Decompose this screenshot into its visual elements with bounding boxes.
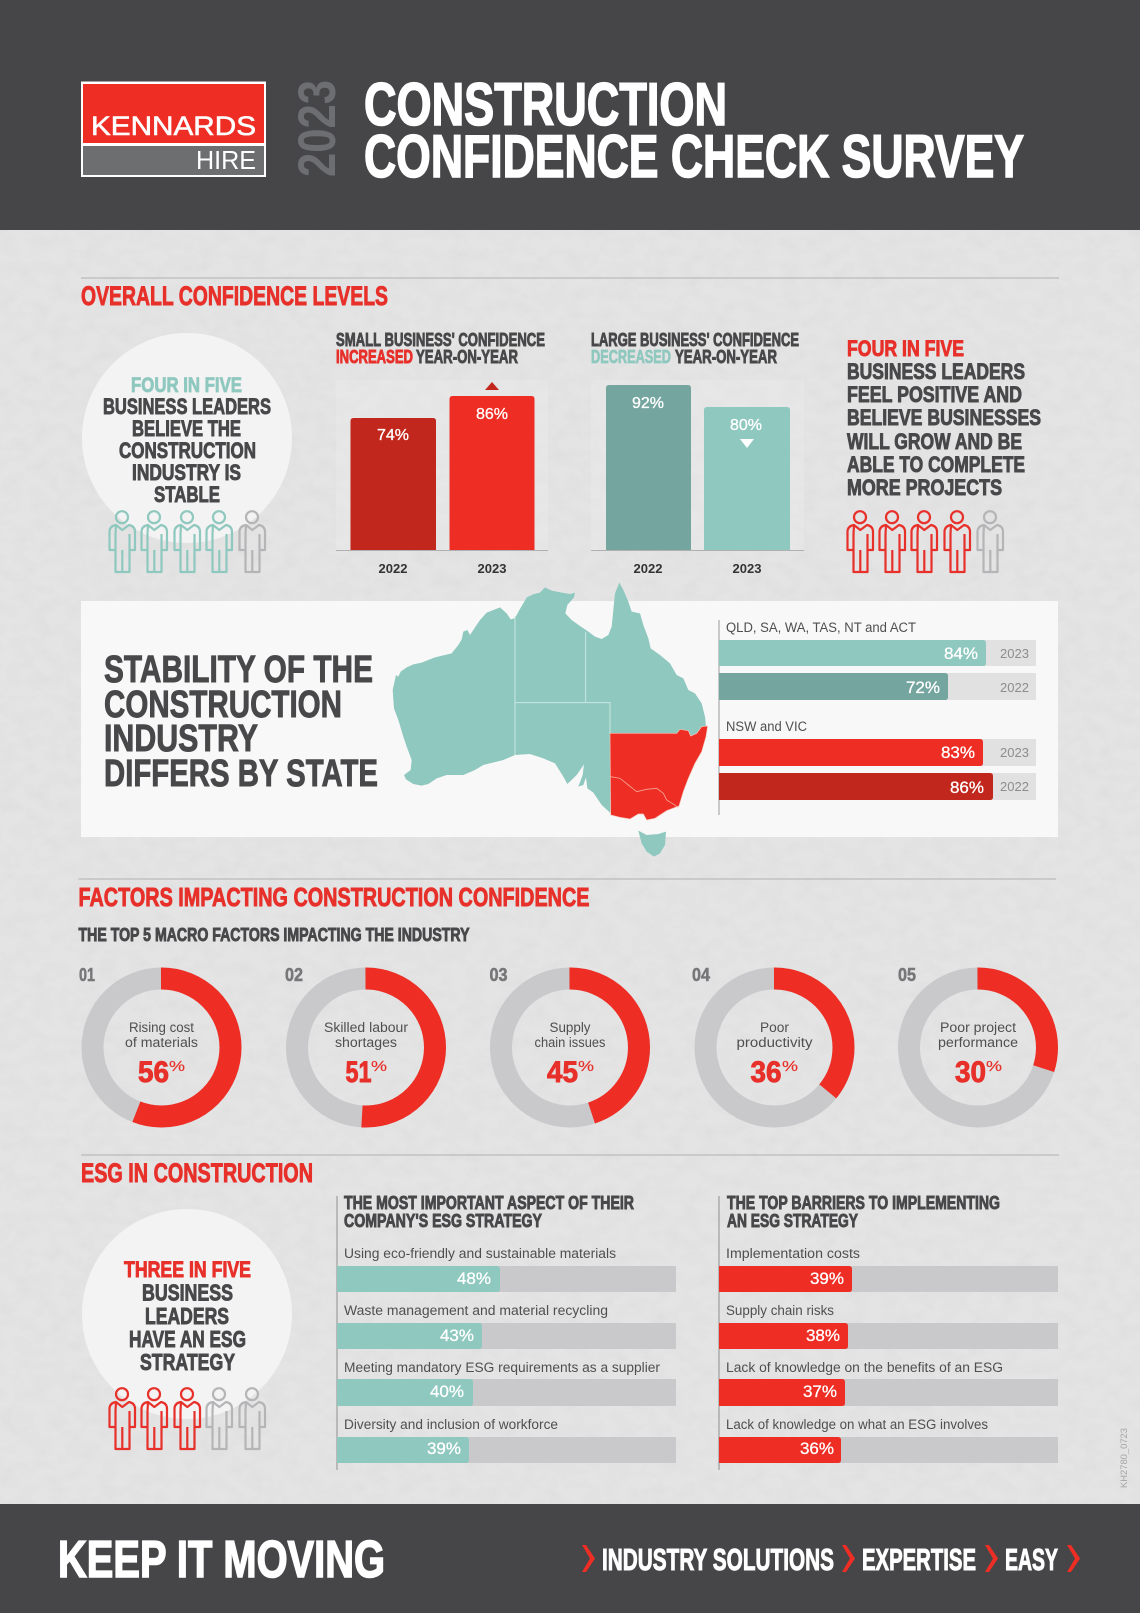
donut 03: supply chain issues: %	[578, 1058, 594, 1075]
chart: most important ESG aspects: THE MOST IMPORTANT ASPECT OF THEIR	[344, 1193, 634, 1213]
donut 05: poor project performance: Poor project	[940, 1020, 1016, 1035]
year 2023 vertical: 2023	[288, 80, 347, 177]
chart: most important ESG aspects	[337, 1193, 676, 1470]
donut 03: supply chain issues: chain issues	[534, 1035, 606, 1050]
chart: top barriers to ESG: THE TOP BARRIERS TO IMPLEMENTING	[727, 1193, 1000, 1213]
chart: large business confidence: 92%	[632, 395, 664, 412]
chart: small business confidence: 74%	[377, 427, 409, 444]
chart: top barriers to ESG: Lack of knowledge on what an ESG involves	[726, 1417, 988, 1432]
chart: large business confidence: LARGE BUSINESS' CONFIDENCE	[591, 329, 799, 350]
donut 02: skilled labour shortages	[285, 965, 435, 1116]
callout: four in five positive	[847, 336, 1041, 572]
chart: most important ESG aspects: 43%	[440, 1326, 474, 1345]
chart: state bars: 2023	[1000, 745, 1029, 760]
donut 02: skilled labour shortages: 02	[285, 965, 303, 985]
chart: large business confidence: 80%	[730, 417, 762, 434]
donut 03: supply chain issues: 03	[490, 965, 508, 985]
callout: four in five positive: BUSINESS LEADERS	[847, 359, 1025, 384]
chart: state bars: 84%	[944, 644, 978, 663]
chart: small business confidence: 86%	[476, 406, 508, 423]
heading: stability differs by state	[104, 649, 378, 795]
logo: Kennards Hire	[81, 82, 266, 177]
chart: large business confidence	[591, 329, 804, 576]
callout: three in five ESG: LEADERS	[145, 1303, 229, 1329]
donut 05: poor project performance	[898, 965, 1047, 1116]
footer values: EASY	[1005, 1542, 1058, 1577]
concrete background	[0, 230, 1140, 1504]
donut 05: poor project performance: performance	[938, 1035, 1018, 1050]
donut 02: skilled labour shortages: 51	[346, 1056, 372, 1089]
donut 04: poor productivity: Poor	[760, 1020, 789, 1035]
callout: three in five ESG: BUSINESS	[142, 1280, 233, 1306]
chart: small business confidence: SMALL BUSINESS' CONFIDENCE	[336, 329, 545, 350]
chart: large business confidence: DECREASED	[591, 346, 671, 367]
chart: state bars	[719, 620, 1036, 815]
donut 01: rising cost of materials: of materials	[125, 1035, 198, 1050]
callout: four in five stable: INDUSTRY IS	[132, 460, 241, 485]
chart: small business confidence: INCREASED	[336, 346, 413, 367]
artwork code: KH2780_0723	[1119, 1428, 1129, 1488]
callout: three in five ESG	[82, 1209, 292, 1449]
panel: stability by state	[81, 583, 1058, 857]
title: CONSTRUCTION	[364, 71, 727, 138]
chart: top barriers to ESG: AN ESG STRATEGY	[727, 1211, 858, 1231]
heading: stability differs by state: INDUSTRY	[104, 718, 258, 760]
chart: state bars: NSW and VIC	[726, 719, 807, 734]
chart: top barriers to ESG	[719, 1193, 1058, 1470]
chart: top barriers to ESG: 38%	[806, 1326, 840, 1345]
chart: most important ESG aspects: Meeting mandatory ESG requirements as a supplier	[344, 1360, 661, 1375]
chart: state bars: QLD, SA, WA, TAS, NT and ACT	[726, 620, 916, 635]
section heading: overall confidence: OVERALL CONFIDENCE LEVELS	[81, 281, 388, 311]
chart: top barriers to ESG: Supply chain risks	[726, 1303, 834, 1318]
chart: top barriers to ESG: Lack of knowledge on the benefits of an ESG	[726, 1360, 1003, 1375]
callout: three in five ESG: HAVE AN ESG	[129, 1326, 246, 1352]
chart: state bars: 2022	[1000, 680, 1029, 695]
callout: four in five positive: MORE PROJECTS	[847, 475, 1002, 500]
chart: most important ESG aspects: 39%	[427, 1439, 461, 1458]
chart: most important ESG aspects: Using eco-friendly and sustainable materials	[344, 1246, 616, 1261]
callout: four in five positive: FEEL POSITIVE AND	[847, 382, 1022, 407]
donut 05: poor project performance: 30	[955, 1056, 986, 1089]
footer values: INDUSTRY SOLUTIONS	[602, 1542, 834, 1577]
map: Australia	[393, 583, 708, 857]
callout: four in five stable	[82, 333, 292, 572]
donut 01: rising cost of materials: Rising cost	[129, 1020, 194, 1035]
chart: state bars: 72%	[906, 678, 940, 697]
section heading: factors: FACTORS IMPACTING CONSTRUCTION CONFIDENCE	[78, 882, 590, 912]
chart: small business confidence: YEAR-ON-YEAR	[416, 346, 518, 367]
chart: top barriers to ESG: Implementation costs	[726, 1246, 860, 1261]
chart: top barriers to ESG: 36%	[800, 1439, 834, 1458]
callout: four in five stable: FOUR IN FIVE	[131, 374, 242, 397]
logo: Kennards Hire: KENNARDS	[91, 111, 256, 141]
chart: large business confidence: 2023	[733, 561, 761, 576]
callout: four in five positive: ABLE TO COMPLETE	[847, 452, 1025, 477]
chart: most important ESG aspects: COMPANY'S ESG STRATEGY	[344, 1211, 542, 1231]
heading: stability differs by state: STABILITY OF THE	[104, 649, 373, 691]
subheading: top 5 macro factors: THE TOP 5 MACRO FACTORS IMPACTING THE INDUSTRY	[78, 925, 470, 945]
donut 04: poor productivity: 04	[692, 965, 710, 985]
chart: state bars: 83%	[941, 743, 975, 762]
donut 02: skilled labour shortages: shortages	[335, 1035, 397, 1050]
chart: most important ESG aspects: Waste management and material recycling	[344, 1303, 608, 1318]
callout: four in five stable: STABLE	[154, 482, 220, 507]
chart: small business confidence: 2023	[478, 561, 506, 576]
chart: state bars: 86%	[950, 778, 984, 797]
chart: small business confidence: 2022	[379, 561, 407, 576]
donut 01: rising cost of materials: %	[169, 1058, 185, 1075]
title	[364, 71, 1024, 190]
footer values: EXPERTISE	[862, 1542, 976, 1577]
chart: large business confidence: 2022	[634, 561, 662, 576]
donut 01: rising cost of materials: 01	[79, 965, 95, 985]
footer band	[0, 1504, 1140, 1613]
donut 01: rising cost of materials: 56	[138, 1056, 169, 1089]
chart: most important ESG aspects: Diversity and inclusion of workforce	[344, 1417, 558, 1432]
header band	[0, 0, 1140, 230]
donut 02: skilled labour shortages: %	[371, 1058, 387, 1075]
donut 04: poor productivity: %	[782, 1058, 798, 1075]
donut 04: poor productivity	[692, 965, 844, 1116]
icon: people 4 of 5 teal	[110, 511, 265, 572]
callout: four in five stable: BUSINESS LEADERS	[103, 394, 271, 419]
heading: stability differs by state: CONSTRUCTION	[104, 684, 342, 726]
callout: four in five stable: BELIEVE THE	[132, 416, 241, 441]
chart: most important ESG aspects: 40%	[430, 1382, 464, 1401]
chart: top barriers to ESG: 37%	[803, 1382, 837, 1401]
chart: large business confidence: YEAR-ON-YEAR	[675, 346, 777, 367]
callout: three in five ESG: THREE IN FIVE	[124, 1257, 251, 1282]
donut 04: poor productivity: productivity	[736, 1035, 813, 1050]
slogan: KEEP IT MOVING	[58, 1531, 385, 1589]
donut 03: supply chain issues	[490, 965, 639, 1116]
callout: four in five stable: CONSTRUCTION	[119, 438, 256, 463]
icon: people 4 of 5 red	[848, 511, 1003, 572]
donut 03: supply chain issues: Supply	[550, 1020, 591, 1035]
callout: three in five ESG: STRATEGY	[140, 1349, 235, 1375]
chart: state bars: 2022	[1000, 779, 1029, 794]
logo: Kennards Hire: HIRE	[196, 145, 256, 175]
callout: four in five positive: WILL GROW AND BE	[847, 429, 1022, 454]
donut 03: supply chain issues: 45	[547, 1056, 578, 1089]
callout: four in five positive: BELIEVE BUSINESSES	[847, 405, 1041, 430]
chart: state bars: 2023	[1000, 646, 1029, 661]
section heading: ESG: ESG IN CONSTRUCTION	[81, 1158, 313, 1188]
donut 02: skilled labour shortages: Skilled labour	[324, 1020, 409, 1035]
callout: four in five positive: FOUR IN FIVE	[847, 336, 964, 361]
icon: people 3 of 5 red	[110, 1388, 265, 1449]
heading: stability differs by state: DIFFERS BY STATE	[104, 753, 378, 795]
chart: most important ESG aspects: 48%	[457, 1269, 491, 1288]
footer values	[582, 1542, 1080, 1577]
donut 01: rising cost of materials	[79, 965, 230, 1116]
donut 04: poor productivity: 36	[750, 1056, 782, 1089]
chart: small business confidence	[336, 329, 548, 576]
donut 05: poor project performance: 05	[898, 965, 916, 985]
donut 05: poor project performance: %	[986, 1058, 1002, 1075]
chart: top barriers to ESG: 39%	[810, 1269, 844, 1288]
